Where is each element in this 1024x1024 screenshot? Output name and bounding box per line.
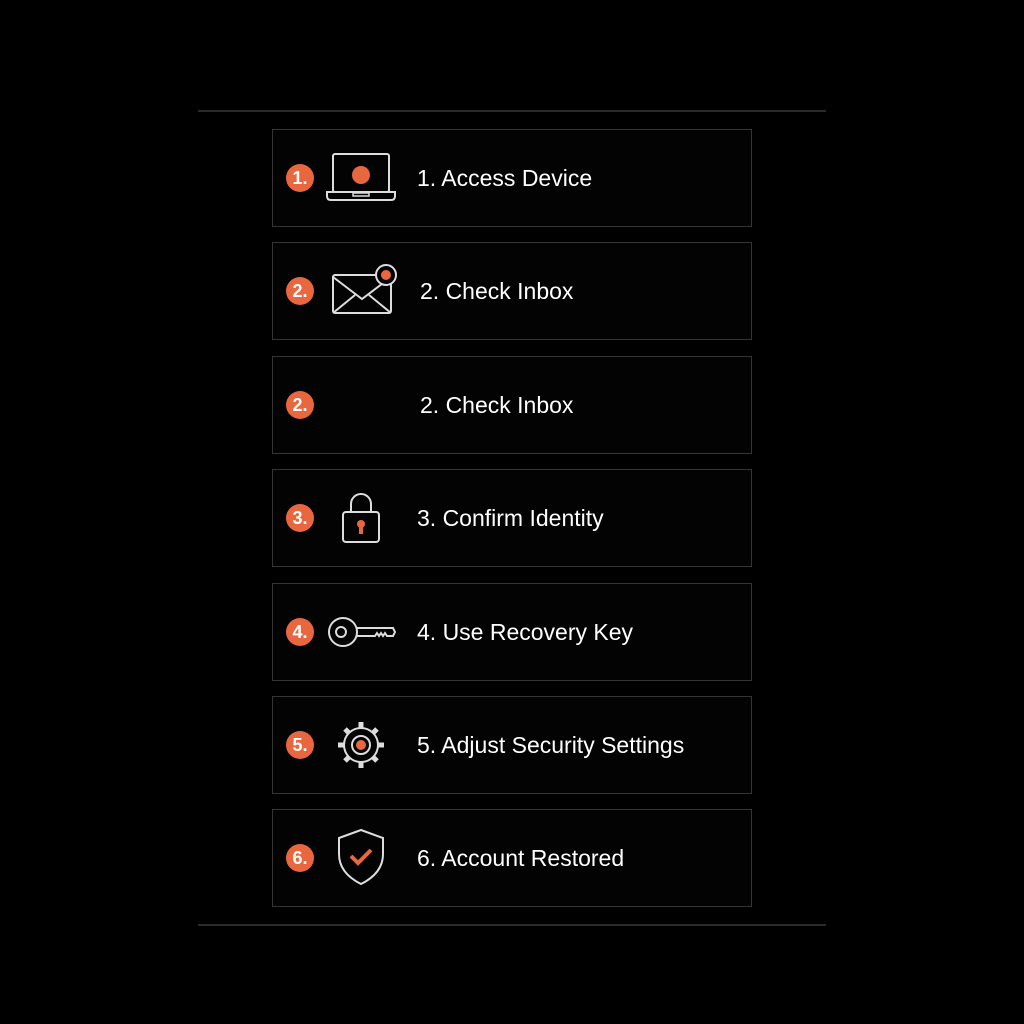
badge 5 bbox=[286, 731, 314, 759]
label: 2. Check Inbox bbox=[420, 392, 573, 418]
panel: step 1 bbox=[272, 129, 752, 227]
panel: step 2 bbox=[272, 242, 752, 340]
icon: key bbox=[328, 617, 396, 647]
panel: step 6 bbox=[272, 809, 752, 907]
badge 2: 2. bbox=[292, 281, 308, 301]
badge 2 bbox=[286, 391, 314, 419]
label: 1. Access Device bbox=[417, 165, 592, 191]
badge 4: 4. bbox=[292, 622, 308, 642]
badge 1 bbox=[286, 164, 314, 192]
icon: laptop bbox=[326, 153, 396, 201]
icon: shield check bbox=[338, 828, 384, 886]
panel: step 4 bbox=[272, 583, 752, 681]
badge 3: 3. bbox=[292, 508, 308, 528]
icon: padlock bbox=[342, 493, 380, 543]
label: 5. Adjust Security Settings bbox=[417, 732, 684, 758]
panel: step 3 bbox=[272, 469, 752, 567]
icon: gear bbox=[338, 722, 384, 768]
label: 3. Confirm Identity bbox=[417, 505, 604, 531]
label: 2. Check Inbox bbox=[420, 278, 573, 304]
icon: envelope bbox=[332, 264, 397, 314]
badge 2: 2. bbox=[292, 395, 308, 415]
label: 4. Use Recovery Key bbox=[417, 619, 633, 645]
badge 2 bbox=[286, 277, 314, 305]
badge 3 bbox=[286, 504, 314, 532]
panel: step 5 bbox=[272, 696, 752, 794]
badge 6: 6. bbox=[292, 848, 308, 868]
panel: step 2 duplicate bbox=[272, 356, 752, 454]
label: 6. Account Restored bbox=[417, 845, 624, 871]
badge 5: 5. bbox=[292, 735, 308, 755]
badge 4 bbox=[286, 618, 314, 646]
badge 1: 1. bbox=[292, 168, 308, 188]
badge 6 bbox=[286, 844, 314, 872]
